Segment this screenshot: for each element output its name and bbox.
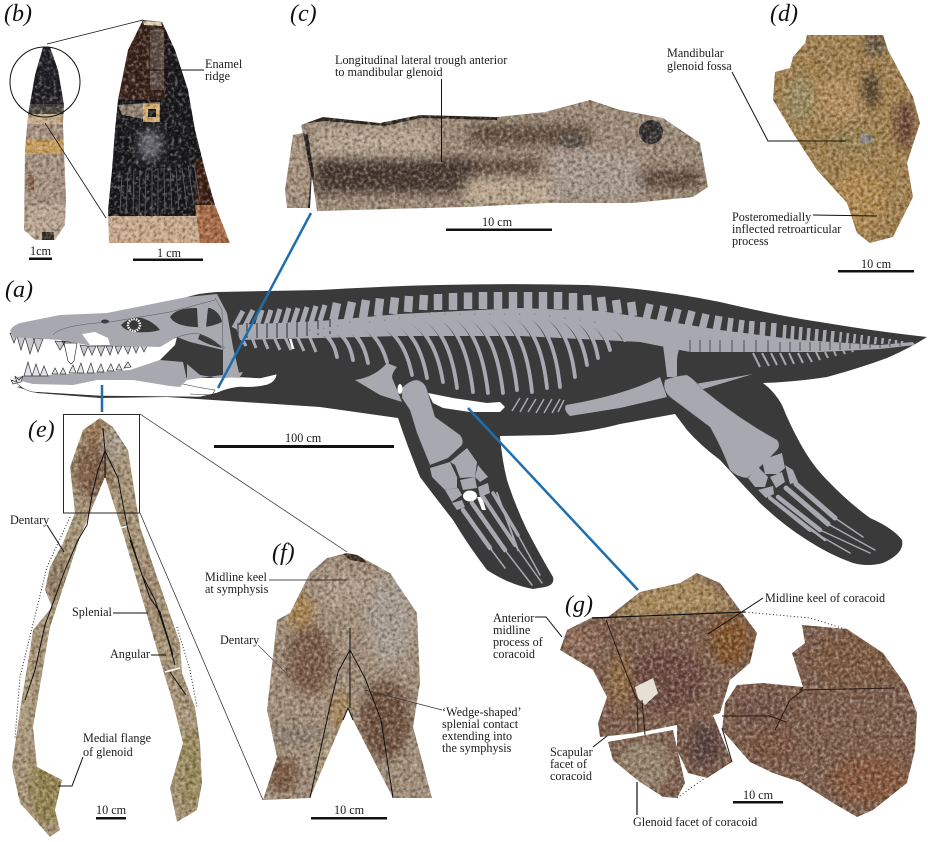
panel g: coracoid photo: [493, 570, 920, 829]
midline black line: [592, 612, 745, 618]
scapular label: coracoid: [550, 769, 592, 783]
anterior process label: Anterior: [493, 611, 534, 625]
retroarticular leader: [813, 215, 877, 216]
wedge label: splenial contact: [442, 717, 519, 731]
anterior process label: midline: [493, 623, 530, 637]
panel label g: (g): [565, 592, 593, 618]
splenial leader: [113, 612, 148, 614]
panel a: whole-body skeletal reconstruction: [10, 284, 927, 589]
medial flange label: Medial flange: [83, 731, 151, 745]
gastralia: [512, 398, 564, 413]
white missing phalanx: [477, 497, 486, 510]
bone photograph: [285, 100, 708, 211]
white mouth gap: [13, 337, 162, 376]
reconstruction dotted outlines: [15, 517, 197, 738]
trough label: Longitudinal lateral trough anterior: [335, 53, 507, 67]
fore-paddle carpals: [430, 448, 490, 510]
panel label c: (c): [290, 1, 317, 27]
keel label: at symphysis: [205, 582, 269, 596]
scale bar: 10 cm: [482, 215, 513, 229]
scale bar 100 cm: 100 cm: [285, 431, 322, 445]
zoom connector lines e to f: [140, 414, 347, 800]
white breaks: [120, 526, 180, 672]
white neck mark: [289, 339, 294, 349]
white premaxilla patch: [82, 332, 110, 345]
scale bar 1 cm: 1 cm: [157, 246, 182, 260]
panel c: mandibular glenoid photo: [280, 53, 715, 231]
humerus: [402, 380, 463, 465]
panel label f: (f): [272, 540, 295, 566]
ischium: [695, 374, 753, 390]
anterior process label: process of: [493, 635, 544, 649]
neck ribs: [240, 333, 316, 352]
scapular leader: [593, 736, 607, 747]
nostril: [101, 320, 109, 324]
pelvis ilium: [663, 335, 687, 377]
enlargement circle: [10, 47, 80, 117]
panel f: symphysis photo: [205, 550, 522, 820]
lower temporal opening: [198, 334, 222, 348]
orbit: [121, 318, 160, 332]
symphysis photograph: [260, 550, 435, 802]
temporal fenestra: [170, 308, 222, 327]
dotted reconstruction: [677, 612, 848, 798]
scale bar 1 cm: [133, 246, 203, 261]
glenoid facet label: Glenoid facet of coracoid: [633, 815, 757, 829]
scale bar 100 cm: [214, 431, 394, 448]
retroarticular label: process: [732, 234, 769, 248]
wedge label: the symphysis: [442, 741, 512, 755]
enamel ridges: [120, 165, 200, 217]
hind digits: [770, 484, 875, 553]
fore digits: [463, 493, 542, 585]
scale bar: 10 cm: [334, 803, 365, 817]
temporal bar: [197, 308, 208, 327]
angular leader: [151, 654, 166, 656]
trunk ribs: [312, 314, 625, 393]
wedge label: extending into: [442, 729, 512, 743]
scapula: [355, 363, 402, 402]
vertebral column band: [235, 308, 915, 352]
neural spines: [234, 292, 902, 344]
angular label: Angular: [110, 647, 150, 661]
suture lines: [310, 628, 393, 798]
enlargement box: [64, 414, 140, 513]
lower teeth: [11, 362, 131, 384]
pubis: [565, 377, 667, 416]
enamel ridge label: Enamel: [205, 57, 243, 71]
medial flange leader: [58, 757, 83, 786]
scale bar: [733, 788, 783, 804]
upper teeth: [10, 333, 147, 364]
scapular label: facet of: [550, 757, 588, 771]
white missing carpal: [463, 490, 477, 502]
large tooth photo: [105, 18, 235, 248]
enamel ridge label: ridge: [205, 69, 230, 83]
white glenoid mark: [398, 384, 402, 394]
tooth zoom lines: [45, 20, 143, 218]
scale bar: 10 cm: [743, 788, 774, 802]
contact sutures: [25, 428, 186, 700]
scale bar: [311, 803, 387, 820]
scale bar: [446, 215, 552, 231]
scale bar: 10 cm: [96, 803, 127, 817]
rib dark edges: [310, 314, 623, 393]
fossa label: Mandibular: [667, 46, 724, 60]
panel e: mandible photo: [5, 410, 210, 840]
keel label: Midline keel: [205, 570, 268, 584]
articular process: [187, 364, 243, 380]
keel leader: [269, 579, 347, 581]
bone photograph: [770, 30, 925, 245]
hind tarsals: [748, 453, 798, 498]
panel b: tooth photographs: [10, 18, 243, 261]
skull: [10, 294, 240, 378]
skull sutures: [53, 298, 225, 350]
trough label: to mandibular glenoid: [335, 65, 443, 79]
dentary leader: [258, 645, 288, 675]
retroarticular label: Posteromedially: [732, 210, 812, 224]
femur: [664, 375, 779, 478]
scale bar 1cm: 1cm: [30, 244, 52, 258]
wedge label: ‘Wedge-shaped’: [442, 705, 522, 719]
anterior process leader: [535, 617, 562, 637]
body silhouette: [17, 284, 927, 589]
trough leader: [440, 79, 442, 162]
keel label: Midline keel of coracoid: [765, 591, 885, 605]
scale bar: [838, 257, 914, 272]
dentary label: Dentary: [10, 513, 50, 527]
enamel ridge leader: [145, 69, 204, 71]
panel label a: (a): [5, 277, 33, 303]
glenoid facet leader: [636, 782, 638, 815]
coracoid white: [428, 393, 505, 412]
blue locator lines: [102, 213, 638, 590]
wedge leader: [365, 690, 442, 710]
anterior process label: coracoid: [493, 647, 535, 661]
lower jaw white portion: [15, 374, 277, 397]
panel label e: (e): [28, 417, 55, 443]
retroarticular label: inflected retroarticular: [732, 222, 841, 236]
tail chevrons: [753, 350, 853, 367]
keel leader: [708, 598, 763, 634]
angular outline: [183, 384, 215, 395]
scapular label: Scapular: [550, 745, 593, 759]
scale bar: 10 cm: [861, 257, 892, 271]
coracoid photograph: [555, 570, 920, 820]
splenial label: Splenial: [72, 605, 113, 619]
dark accent marks on neck: [238, 319, 330, 338]
dentary leader: [47, 525, 64, 552]
dentary label: Dentary: [220, 633, 260, 647]
plaster patch: [635, 678, 658, 705]
mandible photograph: [5, 410, 210, 840]
small tooth photo: [24, 48, 66, 240]
panel d: glenoid fossa photo: [667, 30, 925, 272]
medial flange label: of glenoid: [83, 745, 133, 759]
fossa leader: [732, 72, 846, 141]
panel label b: (b): [4, 1, 32, 27]
vertebra separators: [690, 340, 900, 352]
panel label d: (d): [770, 1, 798, 27]
lower jaw grey: [13, 360, 187, 387]
fossa label: glenoid fossa: [667, 59, 732, 73]
eye ring: [128, 319, 140, 331]
fracture lines: [606, 620, 895, 762]
